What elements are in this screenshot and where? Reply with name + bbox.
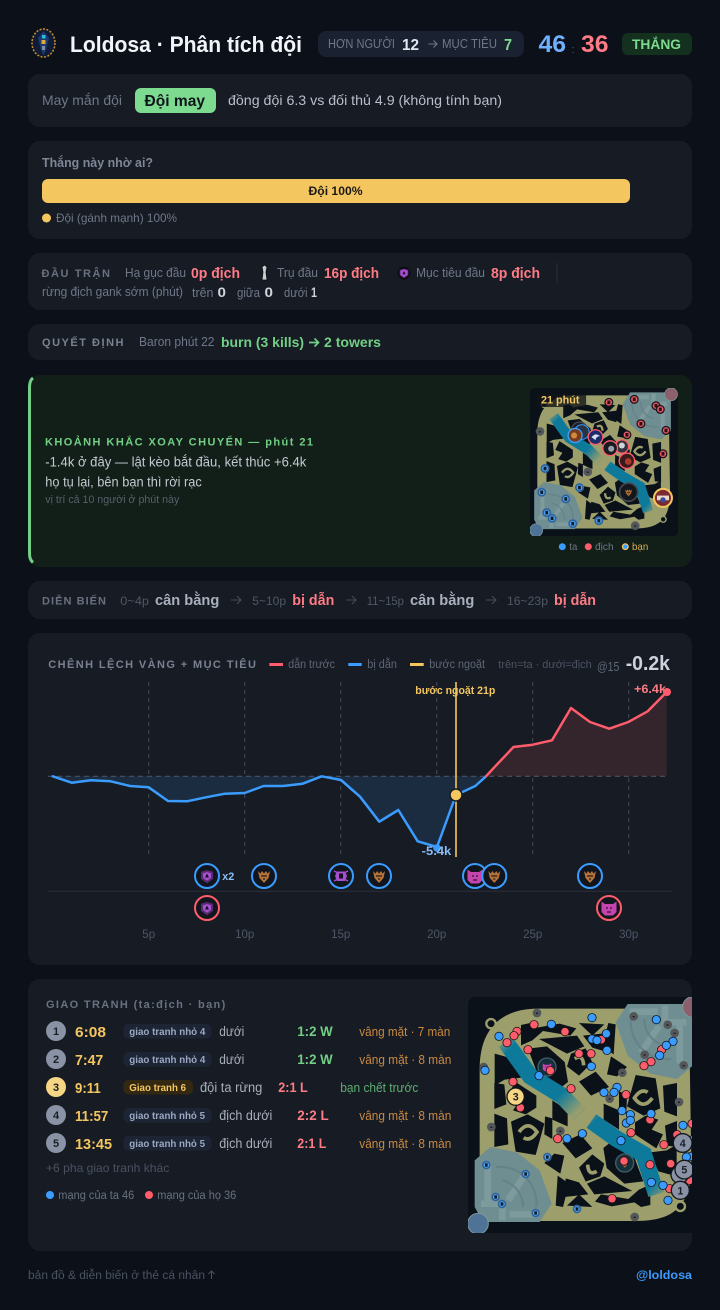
- panel: decisions: QUYẾT ĐỊNH: [42, 336, 124, 349]
- turning point text: họ tụ lại, bên bạn thì rời rạc: [45, 474, 202, 490]
- fight row 1: giao tranh nhỏ 4: [129, 1027, 206, 1038]
- gold at 15: @15: [597, 660, 619, 674]
- fight marker 1: [671, 1181, 689, 1199]
- minimap at minute 21: [530, 388, 678, 537]
- footer: bản đồ & diễn biến ở thẻ cá nhân: [28, 1269, 205, 1282]
- panel: early game: 1: [311, 284, 317, 300]
- fight row 5: 2:1 L: [297, 1135, 327, 1151]
- panel: game flow: 5~10p: [252, 594, 286, 608]
- minimap legend: [559, 541, 648, 553]
- turning point text: vị trí cả 10 người ở phút này: [45, 494, 180, 506]
- chart legend: [269, 658, 592, 671]
- fight row 3: 9:11: [75, 1080, 101, 1097]
- panel: early game: 0p địch: [191, 266, 240, 282]
- fight row 1: vâng mặt · 7 màn: [359, 1025, 450, 1039]
- panel: decisions: Baron phút 22: [139, 335, 215, 349]
- fight row 5: 13:45: [75, 1136, 112, 1153]
- fight row 4: địch dưới: [219, 1108, 272, 1123]
- death map: [468, 997, 704, 1234]
- panel: gold difference chart: [28, 633, 692, 965]
- panel: game flow: cân bằng: [155, 591, 219, 609]
- title: Loldosa · Phân tích đội: [70, 32, 302, 57]
- panel: team luck: [28, 74, 692, 127]
- turning point marker: [415, 682, 496, 857]
- panel: who carried: [28, 141, 692, 239]
- fight row 4: 4: [53, 1110, 60, 1122]
- panel: early game: rừng địch gank sớm (phút): [42, 285, 183, 299]
- panel: game flow: 11~15p: [367, 594, 404, 608]
- trough label: -5.4k: [422, 844, 452, 858]
- fight marker 1: 1: [677, 1185, 683, 1197]
- chart legend: bị dẫn: [367, 658, 397, 671]
- fight row 3: bạn chết trước: [340, 1081, 418, 1095]
- panel: team luck: May mắn đội: [42, 92, 122, 108]
- icon: team emblem: [32, 29, 55, 57]
- stat chip: [318, 31, 524, 57]
- header: [32, 29, 692, 58]
- objective multiplier: x2: [222, 871, 234, 883]
- fight row 3: đội ta rừng: [200, 1080, 262, 1095]
- panel: game flow: bị dẫn: [292, 592, 334, 609]
- icon: tower: [262, 265, 267, 280]
- fight row 2: vâng mặt · 8 màn: [359, 1053, 451, 1067]
- score: [538, 31, 608, 58]
- luck badge: Đội may: [144, 93, 205, 110]
- panel: teamfights: [28, 979, 704, 1251]
- fight row 3: Giao tranh 6: [129, 1083, 186, 1094]
- minimap legend: ta: [569, 541, 577, 553]
- time axis: 30p: [619, 929, 638, 941]
- panel: early game: 0: [218, 284, 226, 300]
- panel: early game: Hạ gục đầu: [125, 266, 186, 280]
- fight marker 3: [507, 1088, 524, 1105]
- fight row 4: vâng mặt · 8 màn: [359, 1109, 451, 1123]
- deaths legend: [46, 1190, 236, 1202]
- fight row 5: vâng mặt · 8 màn: [359, 1137, 451, 1151]
- stat chip: HƠN NGƯỜI: [328, 36, 395, 51]
- fight marker 5: 5: [681, 1165, 687, 1177]
- fight row 1: [46, 1021, 450, 1041]
- chart legend: trên=ta · dưới=địch: [498, 659, 592, 671]
- panel: game flow: DIỄN BIẾN: [42, 594, 106, 608]
- panel: early game: 0: [264, 284, 273, 300]
- arrow: [346, 596, 356, 604]
- deaths legend: mạng của ta 46: [58, 1190, 134, 1202]
- time axis: 5p: [142, 929, 155, 941]
- fight row 2: [46, 1049, 451, 1069]
- panel: decisions: [28, 324, 692, 360]
- fight row 1: 6:08: [75, 1024, 106, 1041]
- panel: game flow: bị dẫn: [554, 592, 596, 609]
- result badge: [622, 33, 692, 55]
- footer: [28, 1269, 693, 1282]
- fight row 3: 3: [53, 1082, 59, 1094]
- result badge: THẮNG: [632, 35, 681, 52]
- panel: game flow: [28, 581, 692, 619]
- fight row 3: 2:1 L: [278, 1079, 308, 1095]
- chart legend: dẫn trước: [288, 658, 335, 671]
- stat chip: MỤC TIÊU: [442, 36, 497, 51]
- panel: game flow: 0~4p: [120, 594, 149, 608]
- baron pit: [538, 1058, 556, 1076]
- fight marker 4: 4: [680, 1138, 686, 1150]
- fight marker 2: [670, 1168, 688, 1182]
- panel: turning point: [28, 375, 692, 567]
- fight marker 5: [675, 1160, 694, 1179]
- fight row 2: dưới: [219, 1052, 244, 1067]
- time axis: 25p: [523, 929, 542, 941]
- chart legend: bước ngoặt: [429, 659, 486, 671]
- fight row 2: 1:2 W: [297, 1051, 333, 1067]
- my champion: [654, 489, 672, 507]
- share bar: Đội 100%: [308, 184, 363, 198]
- fight row 5: 5: [53, 1138, 59, 1150]
- panel: early game: 8p địch: [491, 266, 540, 282]
- more fights note: +6 pha giao tranh khác: [46, 1161, 169, 1175]
- objective icons: [195, 864, 621, 920]
- share bar: [42, 179, 630, 203]
- stat chip: 7: [504, 37, 512, 54]
- score: 46: [538, 31, 566, 58]
- turning point marker: bước ngoặt 21p: [415, 685, 496, 697]
- fight row 4: giao tranh nhỏ 5: [129, 1111, 205, 1122]
- fight row 5: giao tranh nhỏ 5: [129, 1139, 205, 1150]
- turning point text: KHOẢNH KHẮC XOAY CHUYỂN — phút 21: [45, 436, 313, 448]
- minute tag: 21 phút: [541, 395, 580, 407]
- panel: who carried: Thắng này nhờ ai?: [42, 155, 153, 170]
- area fills: [53, 692, 667, 847]
- turning point text: -1.4k ở đây — lật kèo bắt đầu, kết thúc +6.4k: [45, 454, 307, 470]
- fight row 5: [46, 1133, 451, 1153]
- panel: early game: [28, 253, 692, 310]
- fight row 1: dưới: [219, 1024, 244, 1039]
- panel: early game: Mục tiêu đầu: [416, 266, 485, 280]
- fight row 5: địch dưới: [219, 1136, 272, 1151]
- dragon pit: [616, 1154, 634, 1172]
- time axis: 10p: [235, 929, 254, 941]
- panel: early game: trên: [192, 286, 214, 300]
- panel: early game: giữa: [237, 286, 260, 300]
- time axis: [142, 929, 638, 941]
- fight row 2: giao tranh nhỏ 4: [129, 1055, 206, 1066]
- gold at 15: [597, 653, 671, 675]
- panel: early game: 16p địch: [324, 266, 379, 282]
- panel: decisions: burn (3 kills): [221, 334, 304, 350]
- turning point text: [45, 436, 313, 506]
- fight row 2: 7:47: [75, 1052, 103, 1069]
- minimap legend: địch: [595, 541, 614, 553]
- time axis: 15p: [331, 929, 350, 941]
- panel: teamfights: GIAO TRANH (ta:địch · bạn): [46, 999, 226, 1011]
- deaths legend: mạng của họ 36: [157, 1190, 236, 1202]
- fight row 2: 2: [53, 1054, 59, 1066]
- fight row 3: [46, 1077, 418, 1097]
- score: 36: [581, 31, 608, 58]
- fight row 1: 1: [53, 1026, 59, 1038]
- icon: shield: [398, 267, 410, 279]
- footer: @loldosa: [636, 1270, 693, 1282]
- panel: early game: dưới: [284, 286, 308, 300]
- panel: team luck: đồng đội 6.3 vs đối thủ 4.9 (không tính bạn): [228, 92, 502, 108]
- fight row 1: 1:2 W: [297, 1023, 333, 1039]
- time axis: 20p: [427, 929, 446, 941]
- fight marker 4: [673, 1134, 692, 1152]
- arrow: [231, 596, 241, 604]
- minimap legend: bạn: [632, 541, 648, 553]
- score: :: [572, 44, 575, 56]
- panel: game flow: cân bằng: [410, 591, 474, 609]
- panel: decisions: 2 towers: [324, 334, 381, 350]
- peak label: +6.4k: [634, 682, 666, 696]
- dragon: [620, 483, 638, 501]
- panel: early game: Trụ đầu: [277, 266, 318, 280]
- legend: Đội (gánh mạnh) 100%: [56, 211, 177, 225]
- fight marker 3: 3: [513, 1091, 519, 1103]
- fight row 4: 11:57: [75, 1108, 108, 1125]
- gold at 15: -0.2k: [626, 653, 671, 675]
- gold line: [53, 692, 667, 847]
- fight row 4: [46, 1105, 451, 1125]
- luck badge: [135, 88, 216, 113]
- panel: early game: ĐẦU TRẬN: [42, 267, 110, 280]
- fight row 4: 2:2 L: [297, 1107, 329, 1123]
- arrow: [486, 596, 496, 604]
- chart heading: CHÊNH LỆCH VÀNG + MỤC TIÊU: [48, 658, 256, 671]
- stat chip: 12: [402, 37, 419, 54]
- panel: game flow: 16~23p: [507, 594, 548, 608]
